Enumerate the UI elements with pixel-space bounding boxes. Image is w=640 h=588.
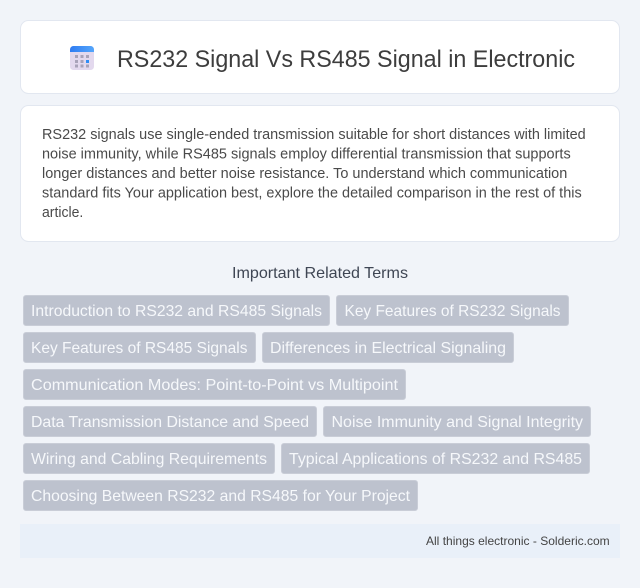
tag: key features RS485: Key Features of RS485 Signals [31, 340, 248, 357]
tag list [24, 296, 590, 510]
tag: electrical signaling: Differences in Electrical Signaling [270, 340, 506, 357]
tag: noise immunity [324, 406, 590, 436]
tag: typical applications: Typical Applications of RS232 and RS485 [289, 451, 582, 468]
panel: summary paragraph: RS232 signals use single-ended transmission suitable for short distances with limited [42, 127, 586, 143]
tag: communication modes: Communication Modes: Point-to-Point vs Multipoint [31, 377, 399, 394]
tag: distance and speed: Data Transmission Distance and Speed [31, 414, 309, 431]
footer: All things electronic - Solderic.com [426, 534, 610, 548]
panel: summary paragraph [20, 106, 620, 242]
tag: choosing: Choosing Between RS232 and RS485 for Your Project [31, 488, 411, 505]
tag: wiring: Wiring and Cabling Requirements [31, 451, 267, 468]
tag: choosing [24, 480, 418, 510]
tag: wiring [24, 444, 274, 474]
tag: introduction [24, 296, 330, 326]
panel: summary paragraph: standard fits Your application best, explore the detailed comparison in the rest of this [42, 186, 582, 202]
title: RS232 Signal Vs RS485 Signal in Electronic [117, 46, 575, 73]
footer [20, 524, 620, 558]
panel: summary paragraph: noise immunity, while RS485 signals employ differential transmission that supports [42, 146, 571, 162]
tag: introduction: Introduction to RS232 and RS485 Signals [31, 303, 322, 320]
icon: calendar grid [70, 46, 94, 70]
tag: communication modes [24, 370, 406, 400]
tag: noise immunity: Noise Immunity and Signal Integrity [332, 414, 583, 431]
tag: key features RS232: Key Features of RS232 Signals [344, 303, 560, 320]
tag: key features RS485 [24, 332, 256, 362]
panel: summary paragraph: article. [42, 205, 83, 221]
tag: distance and speed [24, 406, 316, 436]
panel: header [20, 20, 620, 94]
heading: important related terms: Important Related Terms [232, 265, 408, 282]
tag: typical applications [282, 444, 590, 474]
tag: key features RS232 [336, 296, 568, 326]
panel: summary paragraph: longer distances and better noise resistance. To understand which communication [42, 166, 567, 182]
tag: electrical signaling [262, 332, 514, 362]
